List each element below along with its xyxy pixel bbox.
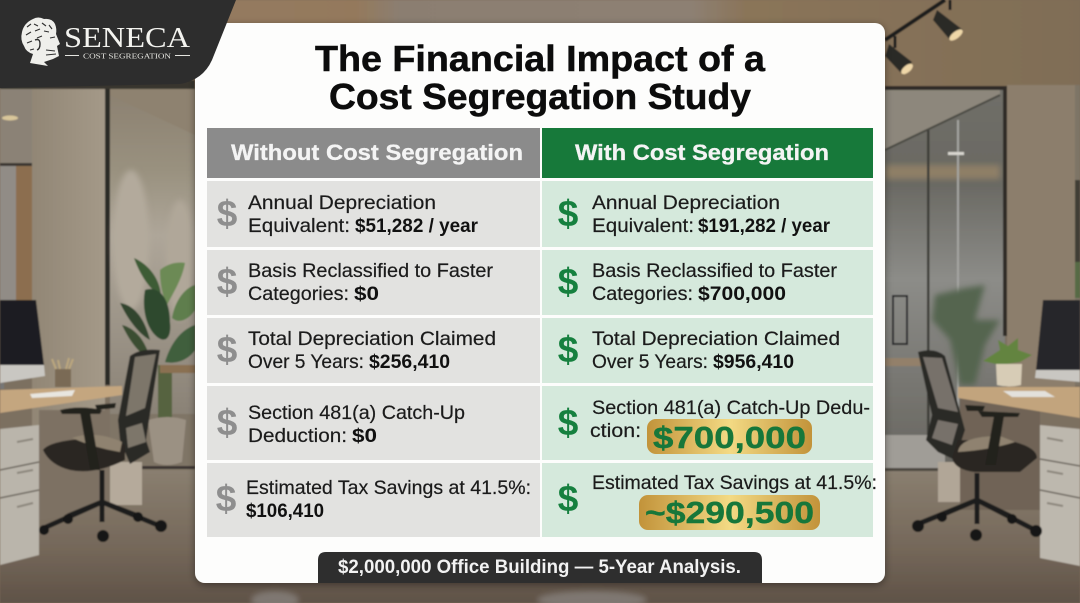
column header: with cost segregation: With Cost Segregation bbox=[575, 140, 829, 165]
row 4 without: section 481(a): Section 481(a) Catch-Up bbox=[248, 402, 465, 424]
icon: green dollar: $ bbox=[558, 193, 579, 234]
logo banner bbox=[0, 0, 236, 88]
row 2 without: basis reclassified: $0 bbox=[354, 283, 379, 305]
icon: gray dollar: $ bbox=[217, 261, 238, 302]
right glass wall bbox=[885, 86, 1007, 471]
row 1 without: annual depreciation: Annual Depreciation bbox=[248, 192, 436, 214]
brand tagline bbox=[65, 52, 190, 60]
row 5 without: tax savings bbox=[207, 463, 540, 537]
row 1 with: annual depreciation bbox=[542, 181, 873, 247]
icon: gray dollar: $ bbox=[217, 402, 238, 443]
row 5 with: tax savings bbox=[542, 463, 877, 537]
right wall edge bbox=[1075, 85, 1080, 385]
icon: green dollar: $ bbox=[558, 329, 579, 370]
row 5 without: tax savings: Estimated Tax Savings at 41.5%: bbox=[246, 477, 531, 499]
blurred plant behind glass bbox=[932, 285, 1000, 385]
row 2 with: basis reclassified: Categories: bbox=[592, 283, 693, 305]
brand tagline: COST SEGREGATION bbox=[83, 52, 172, 60]
row 5 without: tax savings: $106,410 bbox=[246, 500, 324, 522]
row 2 with: basis reclassified: $700,000 bbox=[698, 283, 786, 305]
highlight: ~$290,500: ~$290,500 bbox=[645, 495, 814, 530]
left desk bbox=[0, 386, 142, 520]
right drawers bbox=[1040, 425, 1080, 566]
left pen cup bbox=[52, 358, 73, 387]
column header: with cost segregation bbox=[542, 128, 873, 178]
title bbox=[315, 38, 766, 117]
row 4 with: section 481(a) bbox=[542, 386, 873, 460]
row 1 without: annual depreciation: Equivalent: bbox=[248, 215, 350, 237]
plant pot bbox=[148, 417, 186, 465]
footer caption bar bbox=[318, 552, 762, 583]
icon: gray dollar: $ bbox=[216, 478, 237, 519]
row 4 with: section 481(a): ction: bbox=[590, 420, 641, 442]
far left wall bbox=[0, 89, 32, 306]
row 3 without: total depreciation: $256,410 bbox=[369, 351, 450, 373]
row 3 with: total depreciation: Over 5 Years: bbox=[592, 351, 708, 373]
row 3 with: total depreciation: $956,410 bbox=[713, 351, 794, 373]
icon: gray dollar: $ bbox=[217, 329, 238, 370]
left ceiling edge bbox=[0, 80, 195, 89]
row 1 with: annual depreciation: Equivalent: bbox=[592, 215, 694, 237]
row 3 with: total depreciation bbox=[542, 318, 873, 383]
row 3 without: total depreciation: Total Depreciation Claimed bbox=[248, 328, 496, 350]
left office chair bbox=[39, 350, 167, 542]
right monitor bbox=[1035, 300, 1080, 382]
row 4 with: section 481(a): Section 481(a) Catch-Up Dedu- bbox=[592, 397, 870, 419]
ceiling bbox=[0, 0, 1080, 88]
row 2 without: basis reclassified: Categories: bbox=[248, 283, 349, 305]
icon: philosopher head bbox=[21, 18, 60, 66]
row 3 with: total depreciation: Total Depreciation Claimed bbox=[592, 328, 840, 350]
brand name: SENECA bbox=[64, 23, 191, 54]
row 1 without: annual depreciation: $51,282 / year bbox=[355, 215, 478, 237]
row 3 without: total depreciation bbox=[207, 318, 540, 383]
track lights bbox=[885, 0, 964, 76]
left plant bbox=[120, 258, 195, 465]
right desk plant bbox=[983, 338, 1032, 386]
row 1 without: annual depreciation bbox=[207, 181, 540, 247]
row 5 with: tax savings: Estimated Tax Savings at 41.5%: bbox=[592, 472, 877, 494]
row 2 without: basis reclassified: Basis Reclassified to Faster bbox=[248, 260, 494, 282]
title: The Financial Impact of a bbox=[315, 38, 766, 79]
title: Cost Segregation Study bbox=[329, 76, 751, 117]
row 1 with: annual depreciation: $191,282 / year bbox=[698, 215, 830, 237]
row 4 without: section 481(a): Deduction: bbox=[248, 425, 347, 447]
white card panel bbox=[195, 23, 885, 583]
column header: without cost segregation bbox=[207, 128, 540, 178]
icon: green dollar: $ bbox=[558, 478, 579, 519]
row 1 with: annual depreciation: Annual Depreciation bbox=[592, 192, 780, 214]
row 2 without: basis reclassified bbox=[207, 250, 540, 315]
right desk bbox=[938, 387, 1080, 510]
left wall column bbox=[32, 89, 105, 469]
row 4 without: section 481(a) bbox=[207, 386, 540, 460]
row 3 without: total depreciation: Over 5 Years: bbox=[248, 351, 364, 373]
icon: green dollar: $ bbox=[558, 402, 579, 443]
icon: gray dollar: $ bbox=[217, 193, 238, 234]
column header: without cost segregation: Without Cost Segregation bbox=[231, 140, 523, 165]
row 2 with: basis reclassified bbox=[542, 250, 873, 315]
icon: green dollar: $ bbox=[558, 261, 579, 302]
left glass partition bbox=[105, 89, 195, 470]
right office chair bbox=[912, 350, 1042, 541]
right wall bbox=[1007, 85, 1075, 387]
highlight: $700,000: $700,000 bbox=[653, 420, 806, 455]
row 2 with: basis reclassified: Basis Reclassified to Faster bbox=[592, 260, 838, 282]
floor bbox=[0, 468, 1080, 603]
row 4 without: section 481(a): $0 bbox=[352, 425, 377, 447]
floor reflections bbox=[251, 591, 647, 603]
footer caption bar: $2,000,000 Office Building — 5-Year Analysis. bbox=[338, 557, 741, 578]
left drawers bbox=[0, 425, 39, 565]
left monitor bbox=[0, 300, 45, 389]
